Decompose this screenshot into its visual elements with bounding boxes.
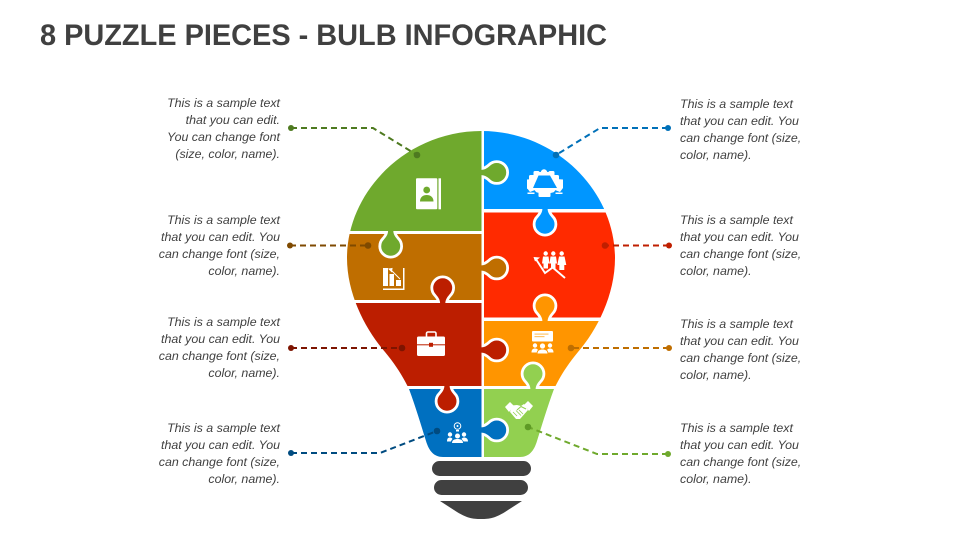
text block: left 4: This is a sample text bbox=[167, 421, 281, 435]
text block: right 3: that you can edit. You bbox=[680, 334, 799, 348]
text block: left 2: This is a sample text bbox=[167, 213, 281, 227]
text block: right 3: color, name). bbox=[680, 368, 752, 382]
text block: right 4 bbox=[680, 421, 801, 486]
text block: right 1: color, name). bbox=[680, 148, 752, 162]
text block: left 2 bbox=[159, 213, 281, 278]
text block: right 3: can change font (size, bbox=[680, 351, 801, 365]
text block: left 3: can change font (size, bbox=[159, 349, 280, 363]
connector: brown bbox=[287, 242, 371, 249]
text block: left 3: color, name). bbox=[208, 366, 280, 380]
bulb base bbox=[432, 461, 531, 519]
text block: right 2: This is a sample text bbox=[680, 213, 793, 227]
text block: left 3: that you can edit. You bbox=[161, 332, 280, 346]
text block: left 1: (size, color, name). bbox=[175, 147, 280, 161]
connector: blue bbox=[553, 125, 671, 158]
text block: right 1: that you can edit. You bbox=[680, 114, 799, 128]
text block: left 1 bbox=[167, 96, 281, 161]
text block: right 1: This is a sample text bbox=[680, 97, 793, 111]
connector: red bbox=[602, 242, 672, 249]
text block: left 2: can change font (size, bbox=[159, 247, 280, 261]
text block: right 2: that you can edit. You bbox=[680, 230, 799, 244]
icon: briefcase bbox=[417, 332, 445, 356]
title: 8 PUZZLE PIECES - BULB INFOGRAPHIC bbox=[40, 19, 607, 52]
piece panels bbox=[340, 125, 624, 459]
icon: handshake bbox=[505, 401, 533, 419]
text block: right 4: This is a sample text bbox=[680, 421, 793, 435]
text block: left 2: color, name). bbox=[208, 264, 280, 278]
knobs bbox=[380, 162, 556, 441]
icon: contact book bbox=[416, 178, 441, 209]
text block: left 3 bbox=[159, 315, 281, 380]
text block: right 2 bbox=[680, 213, 801, 278]
text block: left 4: can change font (size, bbox=[159, 455, 280, 469]
text block: right 3: This is a sample text bbox=[680, 317, 793, 331]
text block: left 4: color, name). bbox=[208, 472, 280, 486]
text block: right 4: that you can edit. You bbox=[680, 438, 799, 452]
text block: right 4: color, name). bbox=[680, 472, 752, 486]
text block: left 3: This is a sample text bbox=[167, 315, 281, 329]
bulb puzzle pieces bbox=[340, 125, 624, 459]
text block: left 1: You can change font bbox=[167, 130, 281, 144]
icon: presentation audience bbox=[532, 331, 554, 354]
icon: conference table bbox=[527, 169, 563, 197]
text block: left 1: that you can edit. bbox=[186, 113, 280, 127]
connector: deep blue bbox=[288, 428, 440, 456]
connector: dark red bbox=[288, 345, 405, 351]
text block: right 1 bbox=[680, 97, 801, 162]
text block: right 1: can change font (size, bbox=[680, 131, 801, 145]
connector: light green bbox=[525, 424, 671, 457]
text block: left 2: that you can edit. You bbox=[161, 230, 280, 244]
text block: left 1: This is a sample text bbox=[167, 96, 281, 110]
connector: green bbox=[288, 125, 420, 158]
text block: left 4: that you can edit. You bbox=[161, 438, 280, 452]
icon: team and growth arrow bbox=[534, 251, 566, 278]
text block: right 4: can change font (size, bbox=[680, 455, 801, 469]
icon: bar chart bbox=[383, 268, 404, 290]
text block: right 3 bbox=[680, 317, 801, 382]
icon: team with idea bbox=[447, 423, 468, 443]
text block: right 2: color, name). bbox=[680, 264, 752, 278]
text block: right 2: can change font (size, bbox=[680, 247, 801, 261]
text block: left 4 bbox=[159, 421, 281, 486]
connector: orange bbox=[568, 345, 672, 351]
